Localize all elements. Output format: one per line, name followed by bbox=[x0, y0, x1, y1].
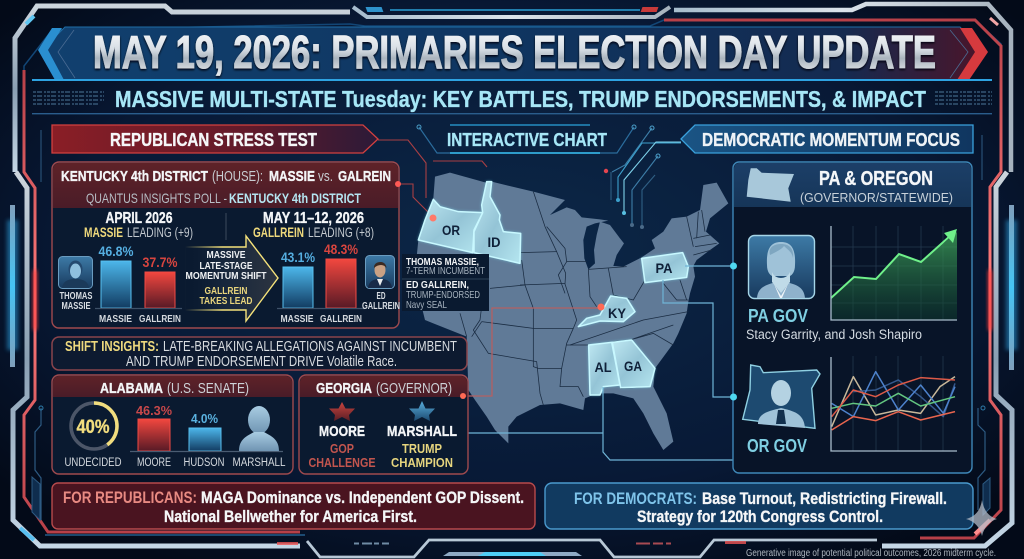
Kentucky heading: (HOUSE): bbox=[212, 168, 263, 185]
state labels bbox=[442, 222, 672, 375]
callout: for Democrats: FOR DEMOCRATS: bbox=[574, 489, 697, 508]
PA and Oregon heading: PA & OREGON bbox=[819, 168, 933, 190]
April 2026 heading: APRIL 2026 bbox=[106, 210, 173, 227]
undecided ring: 40% bbox=[76, 417, 110, 438]
portrait: Thomas Massie bbox=[58, 256, 93, 312]
Massie and Gallrein callout: 7-TERM INCUMBENT bbox=[406, 265, 485, 277]
PA gov label: Stacy Garrity, and Josh Shapiro bbox=[746, 327, 922, 342]
panel: shift insights bbox=[52, 337, 467, 370]
state labels: OR bbox=[442, 222, 460, 238]
title banner bbox=[38, 26, 988, 80]
Alabama heading bbox=[100, 381, 249, 397]
PA and Oregon heading: (GOVERNOR/STATEWIDE) bbox=[800, 190, 953, 205]
arrow: momentum shift: TAKES LEAD bbox=[200, 295, 253, 307]
state: Idaho bbox=[474, 182, 521, 263]
bar chart: April 2026: GALLREIN bbox=[139, 313, 181, 325]
panel: shift insights: LATE-BREAKING ALLEGATIONS AGAINST INCUMBENT bbox=[163, 338, 457, 355]
Marshall column: MARSHALL bbox=[387, 423, 457, 440]
portrait: PA governor bbox=[748, 236, 814, 298]
section header: Democratic momentum focus: DEMOCRATIC MOMENTUM FOCUS bbox=[702, 130, 960, 150]
Kentucky heading: vs. bbox=[318, 168, 333, 185]
Massie and Gallrein callout: ED GALLREIN, bbox=[406, 279, 469, 291]
callout: for Republicans: MAGA Dominance vs. Independent GOP Dissent. bbox=[201, 488, 524, 507]
May 11–12 heading: MAY 11–12, 2026 bbox=[263, 210, 364, 227]
land bbox=[417, 173, 728, 450]
Massie and Gallrein callout: THOMAS MASSIE, bbox=[406, 256, 479, 268]
portrait: OR governor bbox=[743, 365, 820, 428]
Moore column bbox=[308, 423, 376, 470]
callout: for Democrats bbox=[545, 483, 973, 529]
state labels: PA bbox=[656, 260, 672, 276]
bar chart: May 11–12: 48.3% bbox=[324, 241, 358, 257]
bar chart: April 2026: MASSIE bbox=[99, 313, 132, 325]
panel: shift insights: SHIFT INSIGHTS: bbox=[65, 338, 159, 355]
state: Kentucky bbox=[578, 296, 635, 327]
Georgia heading: (GOVERNOR) bbox=[376, 381, 452, 397]
Massie and Gallrein callout: Navy SEAL bbox=[406, 299, 447, 311]
arrow: momentum shift: GALLREIN bbox=[204, 285, 248, 297]
Kentucky heading: GALREIN bbox=[338, 168, 391, 185]
state: Alabama bbox=[589, 342, 620, 395]
bar chart: Alabama: MOORE bbox=[137, 457, 171, 469]
Massie and Gallrein callout: TRUMP-ENDORSED bbox=[406, 289, 480, 301]
line chart: PA upward trend bbox=[831, 226, 957, 320]
Moore column: CHALLENGE bbox=[308, 455, 376, 470]
portrait: Ed Gallrein bbox=[362, 256, 400, 312]
bar chart: Alabama bbox=[130, 403, 286, 469]
undecided ring bbox=[64, 403, 122, 469]
state: Pennsylvania bbox=[642, 253, 688, 283]
Moore column: GOP bbox=[330, 441, 354, 456]
icon: sparkle bbox=[966, 500, 997, 536]
state labels: GA bbox=[624, 358, 642, 374]
bar chart: April 2026 bbox=[95, 243, 182, 325]
section header: interactive chart bbox=[417, 125, 636, 153]
section header: interactive chart: INTERACTIVE CHART bbox=[447, 130, 607, 150]
callout: for Republicans bbox=[52, 483, 535, 529]
PA gov label: PA GOV bbox=[748, 306, 808, 326]
icon: Oregon state bbox=[747, 168, 794, 202]
Moore column: MOORE bbox=[319, 423, 365, 440]
portrait: Ed Gallrein: ED bbox=[376, 291, 386, 302]
Kentucky heading: MASSIE bbox=[269, 168, 315, 185]
section header: Republican stress test: REPUBLICAN STRESS TEST bbox=[110, 130, 317, 150]
Marshall column: CHAMPION bbox=[391, 455, 453, 470]
Alabama heading: ALABAMA bbox=[100, 381, 163, 397]
state: Oregon bbox=[418, 199, 483, 253]
panel: Kentucky 4th District bbox=[52, 162, 401, 328]
bar chart: Alabama: MARSHALL bbox=[232, 457, 286, 469]
panel: shift insights: AND TRUMP ENDORSEMENT DRIVE Volatile Race. bbox=[126, 353, 397, 370]
callout: for Republicans: National Bellwether for America First. bbox=[164, 507, 417, 526]
poll source bbox=[86, 190, 361, 206]
callout: for Republicans: FOR REPUBLICANS: bbox=[63, 488, 197, 507]
bar chart: April 2026: 37.7% bbox=[142, 254, 178, 270]
map connectors bbox=[430, 214, 733, 460]
arrow: momentum shift: LATE-STAGE bbox=[200, 260, 252, 272]
PA gov label bbox=[746, 306, 922, 342]
icon: Marshall silhouette bbox=[239, 406, 279, 451]
arrow: momentum shift: MASSIVE bbox=[206, 249, 246, 261]
PA and Oregon heading bbox=[800, 168, 953, 205]
poll source: QUANTUS INSIGHTS POLL - bbox=[86, 190, 227, 206]
bar chart: Alabama: 46.3% bbox=[136, 403, 172, 418]
Georgia heading: GEORGIA bbox=[316, 381, 372, 397]
Marshall column: TRUMP bbox=[402, 441, 442, 456]
bar chart: Alabama: 4.0% bbox=[191, 411, 218, 426]
callout: for Democrats: Base Turnout, Redistricting Firewall. bbox=[702, 489, 947, 508]
bar chart: April 2026: 46.8% bbox=[98, 243, 134, 259]
undecided ring: UNDECIDED bbox=[64, 457, 122, 469]
panel: Georgia Governor bbox=[299, 375, 468, 474]
OR gov label: OR GOV bbox=[747, 436, 807, 456]
Marshall column bbox=[387, 423, 457, 470]
May 11–12 heading: GALLREIN bbox=[253, 224, 304, 240]
portrait: Thomas Massie: THOMAS bbox=[60, 291, 93, 302]
April 2026 heading: MASSIE bbox=[84, 224, 123, 240]
April 2026 heading bbox=[84, 210, 193, 240]
poll source: KENTUCKY 4th DISTRICT bbox=[229, 190, 361, 206]
arrow: momentum shift: MOMENTUM SHIFT bbox=[186, 270, 267, 282]
callout: for Democrats: Strategy for 120th Congress Control. bbox=[637, 507, 883, 526]
highlighted states bbox=[418, 182, 688, 395]
Alabama heading: (U.S. SENATE) bbox=[167, 381, 249, 397]
line chart: OR volatile trends bbox=[831, 356, 957, 451]
bar chart: May 11–12 bbox=[277, 241, 365, 325]
bar chart: May 11–12: 43.1% bbox=[281, 249, 315, 265]
April 2026 heading: LEADING (+9) bbox=[127, 224, 193, 240]
state labels: KY bbox=[608, 305, 627, 321]
bar chart: Alabama: HUDSON bbox=[184, 457, 224, 469]
left cyan chevron bbox=[38, 28, 64, 80]
panel: PA and Oregon bbox=[730, 162, 972, 473]
Georgia heading bbox=[316, 381, 452, 397]
May 11–12 heading bbox=[253, 210, 374, 240]
portrait: Thomas Massie: MASSIE bbox=[62, 301, 91, 312]
bar chart: May 11–12: GALLREIN bbox=[320, 313, 362, 325]
panel: Alabama U.S. Senate bbox=[52, 375, 293, 474]
right red chevron bbox=[957, 28, 988, 80]
icon: red star bbox=[329, 402, 355, 421]
map bbox=[402, 173, 733, 460]
section header: Republican stress test bbox=[52, 125, 378, 153]
state labels: ID bbox=[488, 234, 500, 250]
bar chart: May 11–12: MASSIE bbox=[280, 313, 314, 325]
portrait: Ed Gallrein: GALLREIN bbox=[362, 301, 400, 312]
icon: blue star bbox=[409, 401, 435, 421]
Massie and Gallrein callout bbox=[402, 254, 489, 311]
section header: Democratic momentum focus bbox=[681, 125, 973, 153]
May 11–12 heading: LEADING (+8) bbox=[308, 224, 374, 240]
subtitle band bbox=[32, 79, 992, 114]
circuit lines bbox=[378, 126, 681, 229]
state labels: AL bbox=[594, 359, 612, 375]
Kentucky heading bbox=[61, 168, 391, 185]
Kentucky heading: KENTUCKY 4th DISTRICT bbox=[61, 168, 208, 185]
state: Georgia bbox=[612, 340, 655, 388]
arrow: momentum shift bbox=[185, 236, 278, 321]
